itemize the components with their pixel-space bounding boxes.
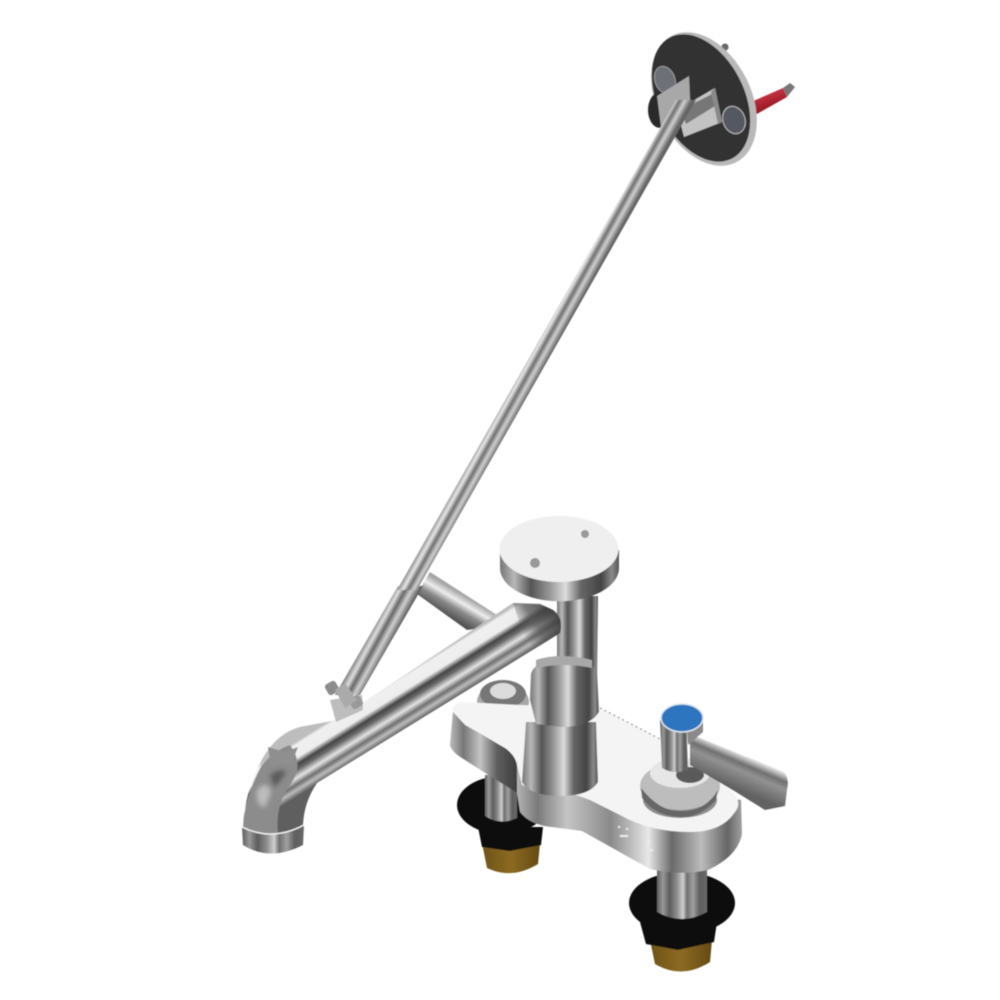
- handle base nut: [640, 758, 720, 818]
- hex collar: [530, 656, 599, 727]
- right supply: black gasket: [629, 872, 735, 934]
- rod clamp: [324, 680, 364, 722]
- left supply: brass nipple: [482, 843, 540, 873]
- spout nozzle: [242, 825, 304, 854]
- valve pillar: [522, 722, 598, 796]
- right supply: black lock nut: [640, 922, 717, 950]
- handle stem: [660, 718, 703, 772]
- valve head: [500, 516, 619, 601]
- left supply: black gasket: [457, 776, 547, 834]
- wall flange: [630, 14, 778, 184]
- wall bracket: [648, 76, 722, 137]
- rear nut: [477, 680, 529, 721]
- valve neck: [557, 596, 598, 680]
- handle lever: [690, 734, 788, 810]
- icon: top wall pin: [712, 44, 728, 56]
- left supply: black lock nut: [478, 827, 543, 851]
- spout tab: [268, 747, 298, 767]
- lower rod sleeve: [335, 586, 423, 695]
- faucet drawing: [242, 14, 795, 972]
- icon: red wall pin: [751, 83, 795, 115]
- spout tube: [243, 603, 561, 834]
- blue index cap: [661, 704, 703, 732]
- right supply: threaded shank: [657, 860, 707, 919]
- deck plate: [450, 702, 742, 873]
- right supply: brass nipple: [650, 940, 712, 972]
- long diagonal rod: [397, 100, 696, 590]
- brace arm: [417, 572, 511, 630]
- left supply: threaded shank: [485, 775, 517, 822]
